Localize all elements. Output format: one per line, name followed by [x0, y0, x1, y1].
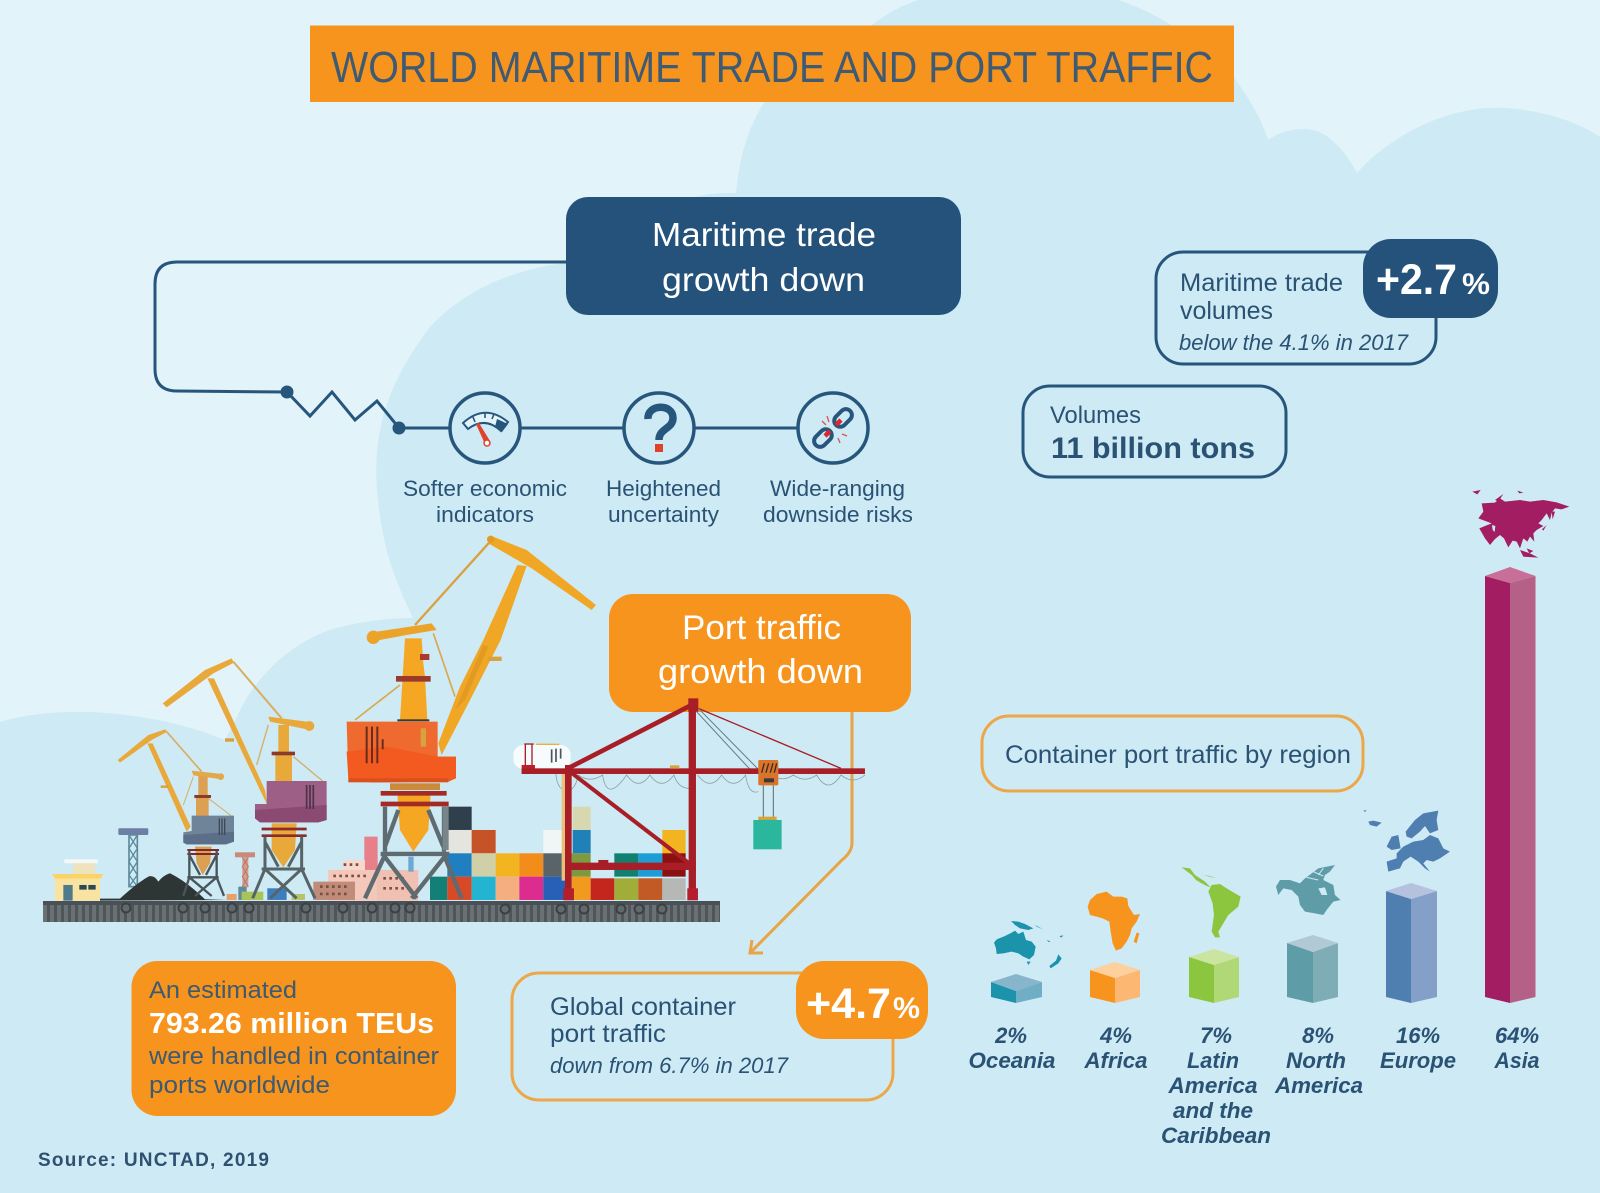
heading: maritime trade growth down: Maritime trade: [652, 216, 876, 253]
callout: volumes 11 billion tons: Volumes: [1050, 402, 1141, 429]
map: europe: [1363, 810, 1450, 872]
heading: port traffic growth down: growth down: [658, 653, 863, 691]
bar: north america 8%: [1287, 935, 1338, 1003]
label: softer economic indicators: [403, 476, 567, 527]
map: africa: [1088, 892, 1140, 951]
heading: maritime trade growth down: growth down: [662, 261, 865, 298]
labels: regional shares: America: [1274, 1073, 1363, 1098]
label: heightened uncertainty: Heightened: [606, 476, 721, 501]
callout: 793.26 million TEUs: [132, 961, 456, 1116]
arrow: port traffic to global container traffic: [750, 712, 852, 953]
label: wide-ranging downside risks: downside risks: [763, 502, 913, 527]
callout: volumes 11 billion tons: [1023, 386, 1286, 477]
bar: oceania 2%: [991, 974, 1042, 1003]
label: heightened uncertainty: [606, 476, 721, 527]
heading: port traffic growth down: Port traffic: [682, 609, 841, 647]
labels: regional shares: 4%: [1099, 1023, 1132, 1048]
label: heightened uncertainty: uncertainty: [608, 502, 719, 527]
crane: medium purple: [163, 658, 327, 898]
heading: container port traffic by region: Container port traffic by region: [1005, 741, 1351, 769]
bar: europe 16%: [1386, 883, 1437, 1003]
callout: global container port traffic: Global container: [550, 993, 736, 1021]
labels: regional shares: Caribbean: [1161, 1123, 1271, 1148]
title: WORLD MARITIME TRADE AND PORT TRAFFIC: [331, 43, 1213, 92]
callout: 793.26 million TEUs: ports worldwide: [149, 1072, 330, 1099]
labels: regional shares: 16%: [1396, 1023, 1440, 1048]
bar: asia 64%: [1485, 567, 1536, 1003]
callout: global container port traffic: [512, 961, 928, 1100]
callout: 793.26 million TEUs: were handled in container: [148, 1043, 439, 1070]
connector: maritime trade to indicators: [155, 262, 799, 434]
callout: maritime trade volumes: [1156, 239, 1498, 364]
floodlight tower: [118, 828, 148, 887]
map: oceania: [994, 921, 1063, 968]
labels: regional shares: 7%: [1200, 1023, 1232, 1048]
building: harbour office: [52, 859, 103, 901]
heading: container port traffic by region: [982, 716, 1363, 791]
labels: regional shares: Africa: [1083, 1048, 1148, 1073]
labels: regional shares: Asia: [1494, 1048, 1540, 1073]
labels: regional shares: 2%: [994, 1023, 1027, 1048]
crane: small grey: [118, 729, 234, 896]
labels: regional shares: 64%: [1495, 1023, 1539, 1048]
callout: global container port traffic: down from 6.7% in 2017: [550, 1053, 789, 1078]
icon: question mark: [624, 393, 694, 463]
callout: maritime trade volumes: %: [1462, 268, 1490, 301]
callout: maritime trade volumes: +2.7: [1376, 256, 1457, 304]
label: wide-ranging downside risks: Wide-ranging: [770, 476, 905, 501]
callout: maritime trade volumes: Maritime trade: [1180, 269, 1343, 297]
icon: gauge: [450, 393, 520, 463]
labels: regional shares: 8%: [1302, 1023, 1334, 1048]
source note: Source: UNCTAD, 2019: [38, 1150, 269, 1171]
crane: large orange: [347, 536, 596, 898]
icon: broken chain link: [798, 393, 868, 463]
bar chart: container port traffic by region: [991, 567, 1536, 1003]
map: north america: [1276, 865, 1341, 915]
containers stack: [430, 807, 686, 900]
coal heap: [100, 873, 227, 901]
labels: regional shares: [968, 1023, 1540, 1148]
labels: regional shares: Europe: [1380, 1048, 1456, 1073]
callout: volumes 11 billion tons: 11 billion tons: [1051, 432, 1255, 465]
heading: maritime trade growth down: [566, 197, 961, 315]
second floodlight and yard items: [227, 852, 305, 900]
trolley and hanging container: [753, 760, 782, 849]
callout: maritime trade volumes: volumes: [1180, 297, 1273, 325]
bar: latin america 7%: [1189, 949, 1239, 1003]
map: latin america: [1182, 867, 1241, 937]
heading: port traffic growth down: [609, 594, 911, 712]
quay dock with tyres: [43, 901, 720, 922]
labels: regional shares: North: [1286, 1048, 1346, 1073]
illustration: port background, hut, lights, city: [52, 828, 418, 901]
callout: global container port traffic: port traffic: [550, 1020, 666, 1048]
callout: maritime trade volumes: below the 4.1% in 2017: [1179, 330, 1409, 355]
title: [310, 26, 1234, 102]
label: wide-ranging downside risks: [763, 476, 913, 527]
callout: global container port traffic: +4.7: [806, 980, 891, 1028]
city buildings: [313, 837, 418, 901]
callout: global container port traffic: %: [893, 992, 920, 1025]
crane: red gantry: [513, 698, 865, 900]
labels: regional shares: America: [1167, 1073, 1258, 1098]
callout: 793.26 million TEUs: 793.26 million TEUs: [149, 1008, 434, 1040]
labels: regional shares: Oceania: [968, 1048, 1056, 1073]
labels: regional shares: Latin: [1187, 1048, 1239, 1073]
callout: 793.26 million TEUs: An estimated: [149, 977, 297, 1004]
bar: africa 4%: [1090, 962, 1140, 1003]
labels: regional shares: and the: [1173, 1098, 1253, 1123]
label: softer economic indicators: Softer economic: [403, 476, 567, 501]
label: softer economic indicators: indicators: [436, 502, 534, 527]
map: asia: [1472, 490, 1569, 558]
